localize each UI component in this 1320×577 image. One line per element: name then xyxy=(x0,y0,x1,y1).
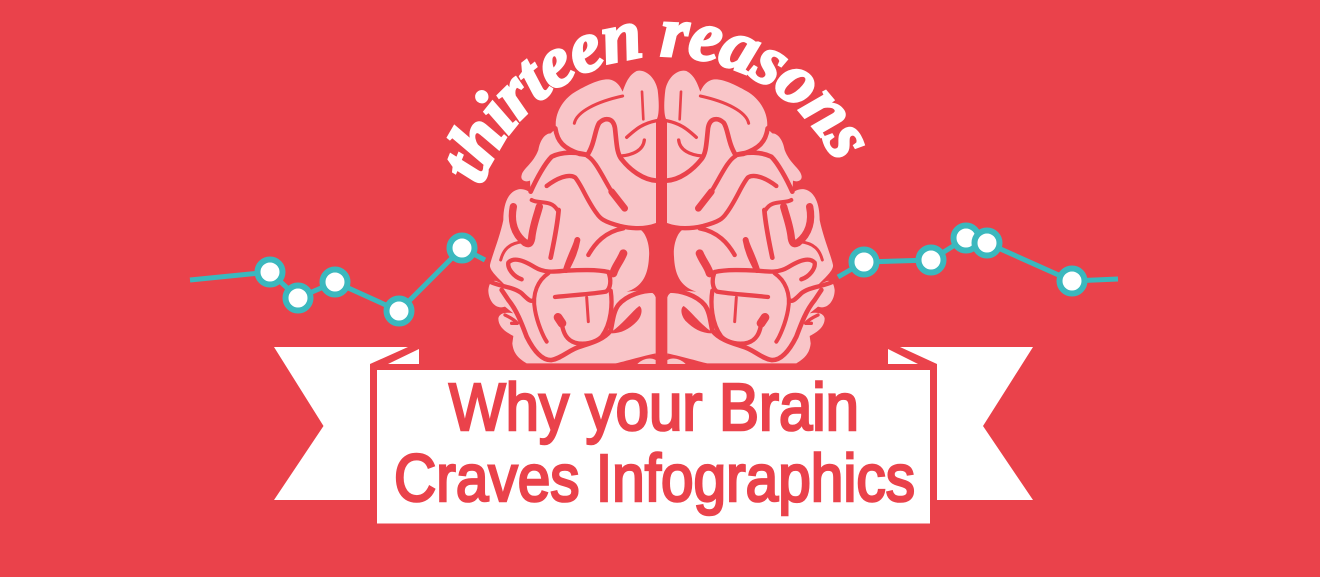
ribbon tail: left xyxy=(274,347,408,500)
ribbon fold: left xyxy=(388,349,419,364)
line chart: left xyxy=(190,236,485,324)
lower folds xyxy=(613,253,623,273)
heading line 1: Why your Brain xyxy=(449,370,859,445)
brain: right hemisphere xyxy=(664,71,835,364)
upper folds xyxy=(574,96,623,123)
ribbon fold: right xyxy=(888,349,918,364)
brain: left hemisphere xyxy=(488,71,659,364)
line chart: right xyxy=(838,226,1118,294)
ribbon tail: right xyxy=(900,347,1033,500)
ribbon banner xyxy=(274,347,1033,524)
banner panel xyxy=(377,370,930,524)
middle folds xyxy=(512,207,539,244)
heading line 2: Craves Infographics xyxy=(394,441,915,516)
icon: brain xyxy=(488,71,835,364)
